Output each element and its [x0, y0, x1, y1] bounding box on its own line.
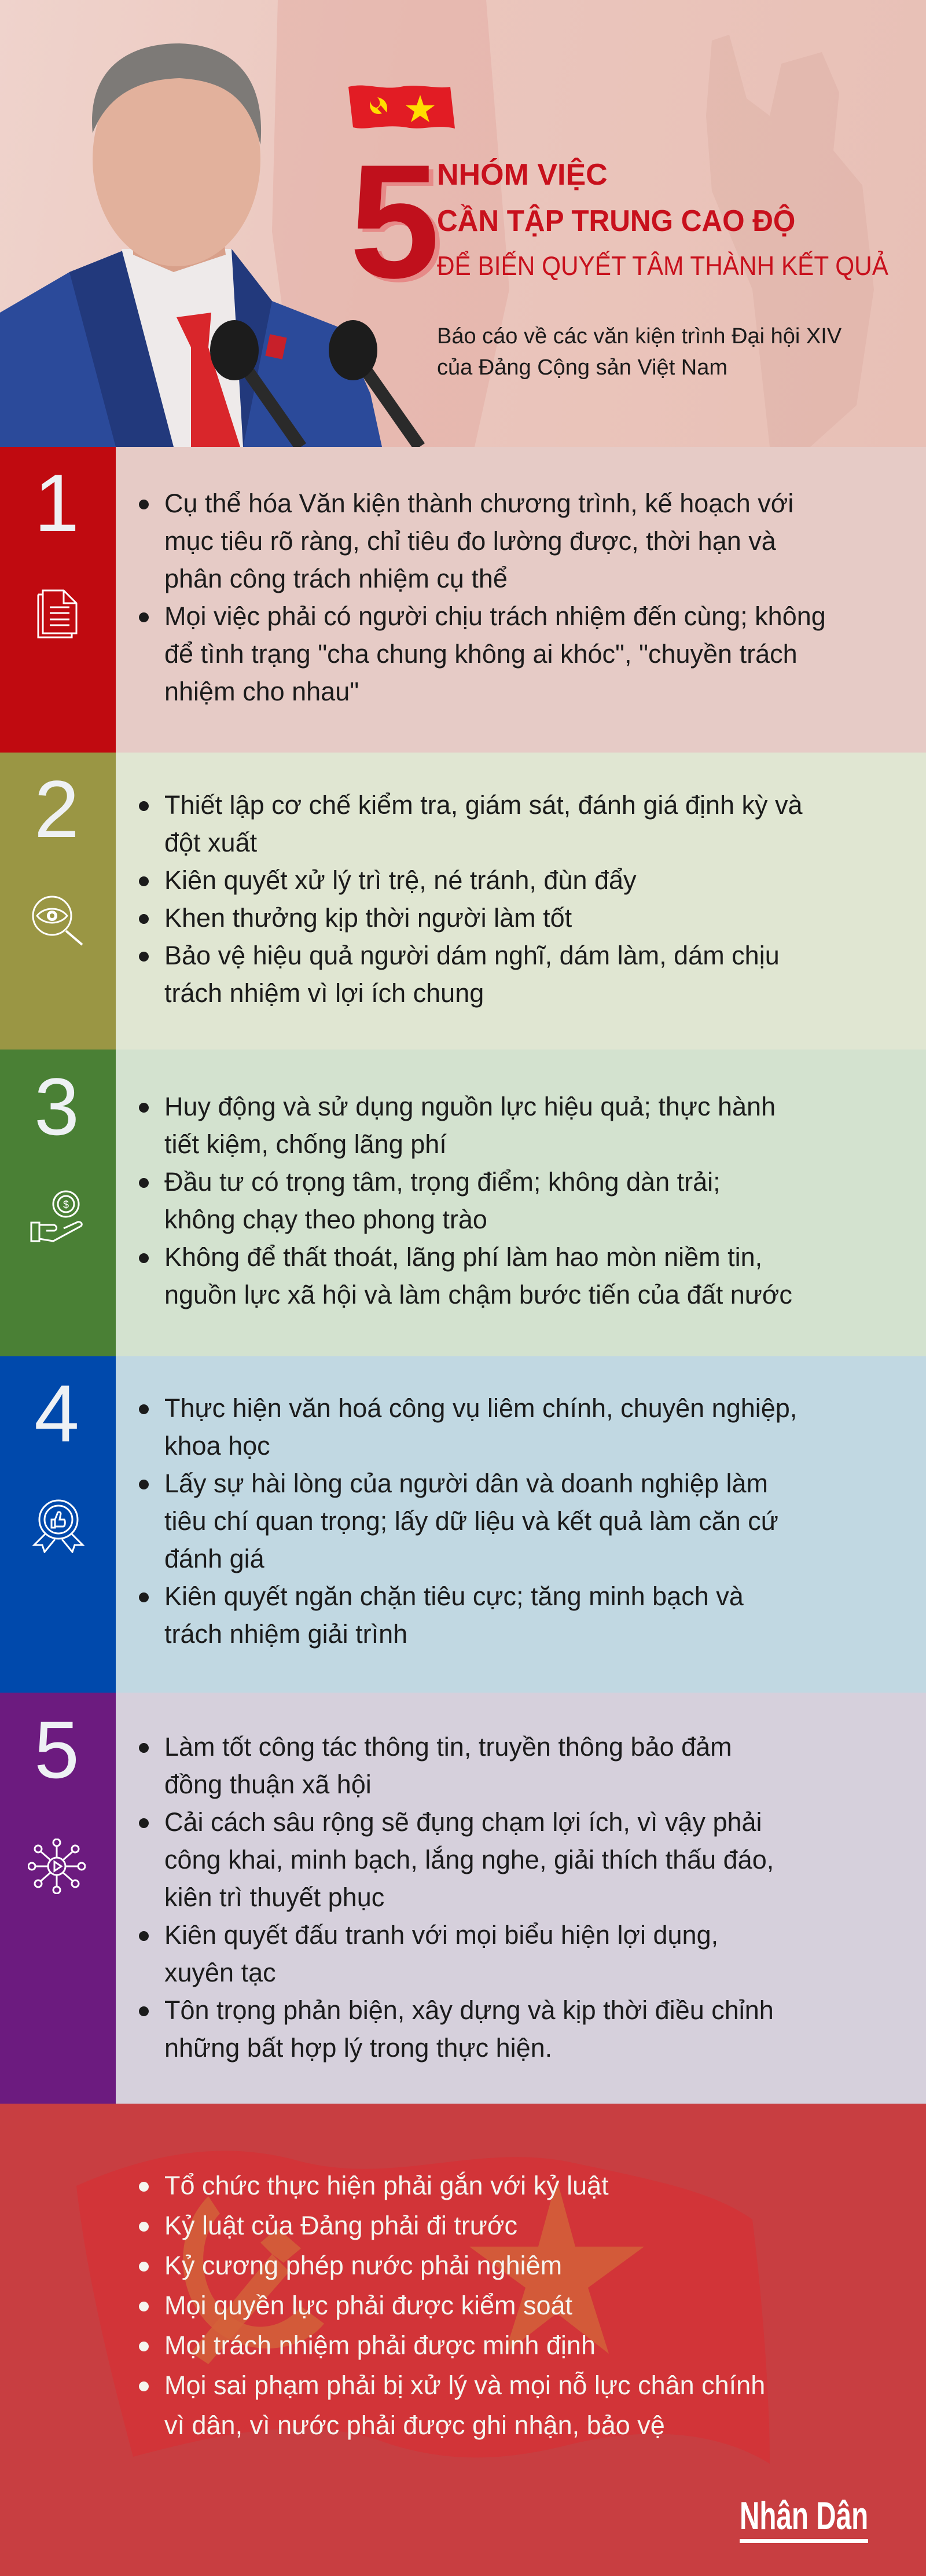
tie — [177, 313, 240, 447]
title: text lines — [437, 157, 888, 281]
text: group 5 bullets: xuyên tạc — [164, 1958, 276, 1987]
icon: hand with coin: $ — [63, 1199, 69, 1210]
text: group 4 bullets: Thực hiện văn hoá công vụ liêm chính, chuyên nghiệp, — [164, 1393, 797, 1423]
text: group 5 bullets: Kiên quyết đấu tranh với mọi biểu hiện lợi dụng, — [164, 1920, 718, 1950]
text: group 4 bullets: khoa học — [164, 1431, 270, 1461]
microphones — [237, 356, 301, 447]
subtitle: Báo cáo về các văn kiện trình Đại hội XIV — [437, 324, 842, 348]
text: group 1 bullets: phân công trách nhiệm cụ thể — [164, 564, 508, 593]
text: group 2 bullets: Khen thưởng kịp thời người làm tốt — [164, 903, 572, 933]
text: conclusion bullets: Kỷ luật của Đảng phải đi trước — [164, 2211, 517, 2240]
text: group 4 bullets: Lấy sự hài lòng của người dân và doanh nghiệp làm — [164, 1469, 768, 1498]
text: conclusion bullets: vì dân, vì nước phải được ghi nhận, bảo vệ — [164, 2410, 665, 2440]
text: group 5 bullets: công khai, minh bạch, lắng nghe, giải thích thấu đáo, — [164, 1845, 774, 1874]
text: group 3 bullets: tiết kiệm, chống lãng phí — [164, 1129, 447, 1159]
number 5: 5 — [34, 1704, 79, 1795]
pin — [265, 334, 287, 359]
title: text lines: ĐỂ BIẾN QUYẾT TÂM THÀNH KẾT QUẢ — [437, 251, 888, 281]
text: group 3 bullets: Đầu tư có trọng tâm, trọng điểm; không dàn trải; — [164, 1167, 721, 1197]
panel: group 3 — [0, 1050, 926, 1356]
number 4: 4 — [34, 1368, 79, 1459]
text: conclusion bullets: Mọi quyền lực phải được kiểm soát — [164, 2291, 572, 2320]
text: group 4 bullets: Kiên quyết ngăn chặn tiêu cực; tăng minh bạch và — [164, 1581, 744, 1611]
text: group 3 bullets: Huy động và sử dụng nguồn lực hiệu quả; thực hành — [164, 1092, 776, 1121]
text: group 2 bullets: Bảo vệ hiệu quả người dám nghĩ, dám làm, dám chịu — [164, 941, 780, 970]
text: group 2 bullets: trách nhiệm vì lợi ích chung — [164, 978, 484, 1008]
text: group 4 bullets — [139, 1393, 797, 1649]
icon: hand with coin — [30, 1190, 83, 1242]
panel: group 2 — [0, 753, 926, 1050]
subtitle: của Đảng Cộng sản Việt Nam — [437, 355, 727, 380]
text: group 5 bullets: kiên trì thuyết phục — [164, 1883, 384, 1912]
icon: eye magnifier — [32, 896, 83, 946]
text: group 1 bullets — [139, 489, 826, 706]
panel: footer conclusions — [0, 2104, 926, 2576]
subtitle — [437, 324, 842, 380]
icon: network — [28, 1839, 86, 1894]
text: group 1 bullets: mục tiêu rõ ràng, chỉ tiêu đo lường được, thời hạn và — [164, 526, 776, 556]
text: group 1 bullets: để tình trạng "cha chung không ai khóc", "chuyền trách — [164, 639, 798, 669]
text: group 1 bullets: Cụ thể hóa Văn kiện thành chương trình, kế hoạch với — [164, 489, 793, 518]
text: group 5 bullets: đồng thuận xã hội — [164, 1770, 372, 1799]
title: text lines: NHÓM VIỆC — [437, 158, 608, 192]
text: group 4 bullets: tiêu chí quan trọng; lấy dữ liệu và kết quả làm căn cứ — [164, 1506, 778, 1536]
panel: group 5 — [0, 1693, 926, 2104]
text: group 2 bullets — [139, 790, 803, 1008]
title: text lines: CẦN TẬP TRUNG CAO ĐỘ — [437, 204, 795, 238]
text: group 3 bullets: không chạy theo phong trào — [164, 1205, 487, 1234]
text: conclusion bullets: Mọi trách nhiệm phải được minh định — [164, 2331, 596, 2360]
text: group 2 bullets: Thiết lập cơ chế kiểm tra, giám sát, đánh giá định kỳ và — [164, 790, 803, 820]
faint flag background — [76, 2151, 770, 2464]
text: group 1 bullets: Mọi việc phải có người chịu trách nhiệm đến cùng; không — [164, 601, 826, 631]
neck and face — [133, 208, 226, 272]
number 1: 1 — [34, 457, 79, 548]
shirt — [122, 249, 243, 447]
text: group 1 bullets: nhiệm cho nhau" — [164, 677, 359, 706]
text: conclusion bullets: Kỷ cương phép nước phải nghiêm — [164, 2251, 562, 2280]
number 3: 3 — [34, 1061, 79, 1152]
text: conclusion bullets — [139, 2171, 765, 2440]
logo: Nhân Dân: Nhân Dân — [740, 2494, 868, 2538]
text: group 5 bullets: Cải cách sâu rộng sẽ đụng chạm lợi ích, vì vậy phải — [164, 1807, 762, 1837]
icon: party flag — [348, 86, 455, 129]
background faint flag and statue — [272, 0, 509, 447]
text: group 3 bullets — [139, 1092, 792, 1309]
person: suit — [0, 249, 382, 447]
icon: document — [37, 589, 78, 638]
text: group 5 bullets: Làm tốt công tác thông tin, truyền thông bảo đảm — [164, 1732, 732, 1762]
text: conclusion bullets: Tổ chức thực hiện phải gắn với kỷ luật — [164, 2171, 609, 2200]
text: conclusion bullets: Mọi sai phạm phải bị xử lý và mọi nỗ lực chân chính — [164, 2370, 765, 2400]
number 2: 2 — [34, 764, 79, 854]
text: group 5 bullets: Tôn trọng phản biện, xây dựng và kịp thời điều chỉnh — [164, 1995, 774, 2025]
title: big number 5: 5 — [350, 131, 440, 312]
text: group 5 bullets — [139, 1732, 774, 2063]
header banner — [0, 0, 926, 447]
text: group 2 bullets: Kiên quyết xử lý trì trệ, né tránh, đùn đẩy — [164, 865, 637, 895]
text: group 4 bullets: đánh giá — [164, 1544, 264, 1573]
text: group 4 bullets: trách nhiệm giải trình — [164, 1619, 407, 1649]
text: group 2 bullets: đột xuất — [164, 828, 257, 857]
panel: group 4 — [0, 1356, 926, 1693]
text: group 3 bullets: nguồn lực xã hội và làm chậm bước tiến của đất nước — [164, 1280, 792, 1309]
text: group 3 bullets: Không để thất thoát, lãng phí làm hao mòn niềm tin, — [164, 1242, 762, 1272]
panel: group 1 — [0, 447, 926, 753]
text: group 5 bullets: những bất hợp lý trong thực hiện. — [164, 2033, 552, 2063]
icon: award with thumbs up — [32, 1499, 84, 1553]
